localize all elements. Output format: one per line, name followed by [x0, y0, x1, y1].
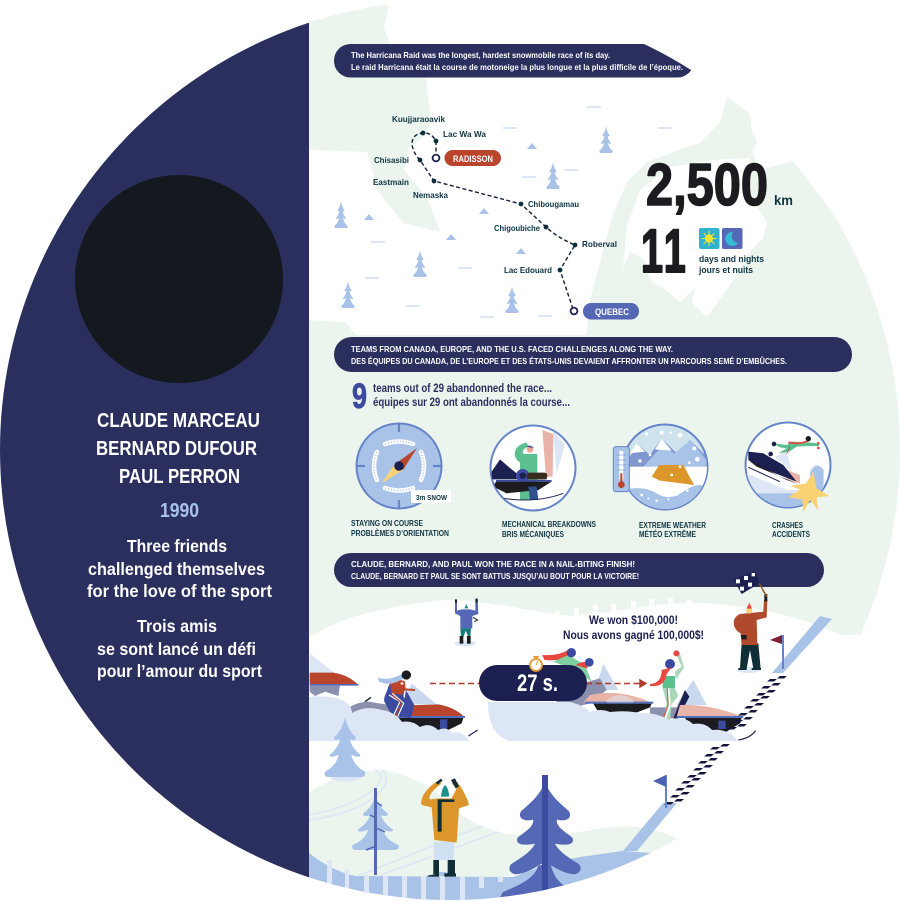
map place labels: Eastmain [373, 177, 409, 187]
navy side panel [0, 0, 309, 901]
map place labels: Lac Wa Wa [443, 129, 486, 139]
icon: extreme weather [613, 424, 710, 513]
heading pill 3: CLAUDE, BERNARD, AND PAUL WON THE RACE IN A NAIL-BITING FINISH! [351, 559, 635, 569]
captions: challenges: STAYING ON COURSE [351, 519, 424, 528]
portrait placeholder [75, 175, 283, 383]
time gap: 27 s.: 27 s. [517, 670, 558, 697]
label: Radisson [444, 150, 501, 166]
captions: challenges [351, 519, 811, 539]
icon: stopwatch [530, 656, 542, 671]
french statement: Trois amis [137, 616, 217, 636]
bottom blue band [309, 803, 677, 901]
captions: challenges: BRIS MÉCANIQUES [502, 530, 565, 539]
stat: days: 11 [641, 216, 686, 285]
checkered finish line [664, 676, 787, 804]
teams abandoned: teams out of 29 abandonned the race... [373, 383, 552, 395]
fence [555, 598, 692, 616]
map landmasses [309, 5, 900, 635]
teams abandoned [352, 382, 570, 409]
map place labels: Kuujjaraoavik [392, 114, 445, 124]
dashed gap arrow [430, 680, 646, 687]
spectator: orange parka [421, 778, 469, 877]
captions: challenges: CRASHES [772, 521, 804, 530]
map trees [334, 126, 613, 313]
icon: crash [743, 422, 833, 513]
text: we won: Nous avons gagné 100,000$! [563, 628, 704, 642]
icon: compass [356, 423, 451, 509]
map place labels: Nemaska [413, 190, 448, 200]
captions: challenges: ACCIDENTS [772, 530, 811, 539]
heading pill 3 [334, 553, 824, 587]
ski track strip [772, 616, 832, 673]
text: we won: We won $100,000! [589, 613, 678, 627]
stat: distance: 2,500 [646, 152, 768, 218]
stat: days: jours et nuits [698, 265, 753, 276]
flag: red [770, 635, 784, 669]
teams abandoned: 9 [352, 377, 367, 416]
english statement [87, 536, 272, 601]
english statement: challenged themselves [88, 559, 265, 579]
map place labels [373, 114, 617, 275]
heading pill 1 [334, 44, 694, 78]
english statement: for the love of the sport [87, 581, 272, 601]
heading pill 1: The Harricana Raid was the longest, hardest snowmobile race of its day. [351, 50, 610, 60]
names: CLAUDE MARCEAU [97, 410, 260, 432]
sled: left cropped [310, 653, 358, 696]
map place labels: Chisasibi [374, 155, 409, 165]
english statement: Three friends [127, 536, 227, 556]
tree: trunk with light boughs [352, 788, 399, 875]
spectator: blue jacket [454, 599, 478, 646]
tree: dark blue [498, 775, 579, 901]
snow hill [314, 600, 840, 635]
gulf white water [623, 158, 767, 317]
sled riders behind timer [542, 648, 594, 682]
map place labels: Lac Edouard [504, 265, 552, 275]
captions: challenges: MÉTÉO EXTRÊME [639, 530, 697, 539]
captions: challenges: MECHANICAL BREAKDOWNS [502, 520, 597, 529]
french statement [97, 616, 262, 681]
heading pill 3: CLAUDE, BERNARD ET PAUL SE SONT BATTUS JUSQU’AU BOUT POUR LA VICTOIRE! [351, 571, 639, 581]
flag: blue [653, 775, 667, 808]
heading pill 1: Le raid Harricana était la course de motoneige la plus longue et la plus difficile de l’époque. [351, 62, 683, 72]
captions: challenges: EXTREME WEATHER [639, 521, 706, 530]
captions: challenges: PROBLÈMES D’ORIENTATION [351, 529, 449, 538]
stat: distance: km [774, 192, 793, 208]
stat: days: days and nights [699, 254, 764, 265]
names: PAUL PERRON [119, 466, 240, 488]
label: Radisson: RADISSON [453, 154, 493, 165]
flag man with checkered flag [734, 571, 767, 673]
ski tracks on the lower hill [309, 770, 498, 876]
background: right side [309, 0, 900, 901]
heading pill 2: TEAMS FROM CANADA, EUROPE, AND THE U.S. FACED CHALLENGES ALONG THE WAY. [351, 344, 673, 354]
label: Quebec: QUEBEC [595, 307, 629, 318]
time gap: 27 s. [479, 665, 587, 701]
label: Quebec [583, 303, 639, 320]
stat: days [642, 228, 764, 275]
snow clouds in front of sleds [309, 696, 738, 741]
tree: pale [325, 717, 365, 782]
year: 1990 [160, 500, 199, 522]
map place labels: Chigoubiche [494, 223, 540, 233]
route line [412, 131, 577, 314]
sled and rider: Paul in red [347, 670, 478, 736]
mint lower hill [309, 770, 677, 880]
heading pill 2 [334, 337, 852, 372]
icon: mechanical breakdown [490, 426, 576, 510]
teams abandoned: équipes sur 29 ont abandonnés la course... [373, 397, 570, 409]
french statement: pour l’amour du sport [97, 661, 262, 681]
icon: moon [722, 228, 742, 249]
french statement: se sont lancé un défi [97, 639, 256, 659]
icon: compass: 3m SNOW [416, 493, 448, 502]
map mountains [364, 143, 537, 254]
map place labels: Roberval [582, 239, 617, 249]
names [96, 410, 260, 488]
sled and riders: Claude and Bernard [550, 650, 756, 740]
names: BERNARD DUFOUR [96, 438, 257, 460]
heading pill 2: DES ÉQUIPES DU CANADA, DE L’EUROPE ET DES ÉTATS-UNIS DEVAIENT AFFRONTER UN PARCOURS SEMÉ D’EMBÛCHES. [351, 355, 787, 366]
icon: sun [699, 228, 720, 249]
text: we won [563, 613, 704, 642]
map place labels: Chibougamau [528, 199, 579, 209]
